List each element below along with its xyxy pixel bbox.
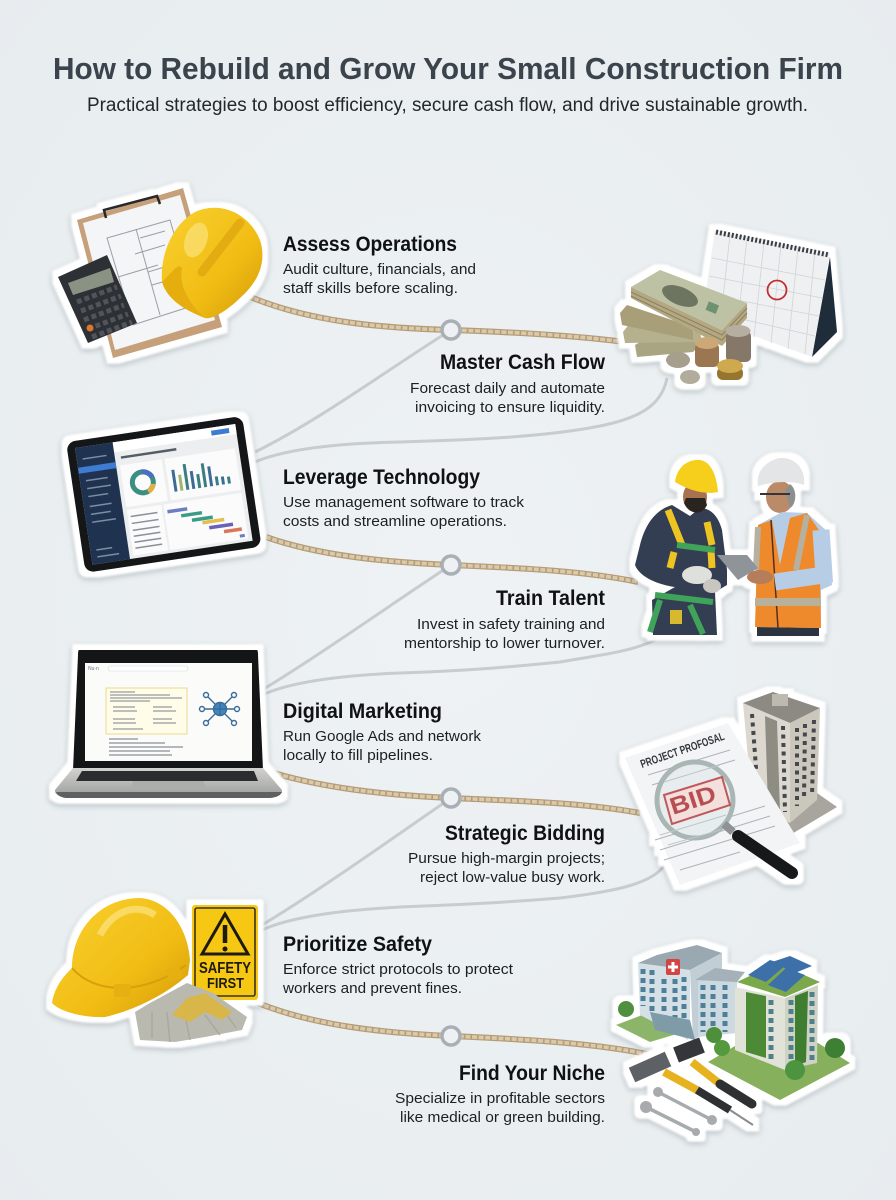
icon: laptop: Nu·n [88,666,99,672]
body: staff skills before scaling. [283,280,458,297]
body: Enforce strict protocols to protect [283,961,514,978]
rope 3 [264,770,640,813]
rope nodes [442,321,460,1045]
text: Train Talent [404,587,605,652]
heading: Digital Marketing [283,700,442,723]
rope 2 [266,537,638,582]
subtitle: Practical strategies to boost efficiency, secure cash flow, and drive sustainable growth. [87,95,808,116]
icon: safety hat, sign and gloves: FIRST [207,975,244,992]
body [283,728,482,764]
coins [666,325,751,384]
heading: Prioritize Safety [283,933,432,956]
body: Invest in safety training and [417,616,605,633]
body [404,616,605,652]
body: invoicing to ensure liquidity. [415,399,605,416]
body [408,850,605,886]
connector: grey lines, section 3 [262,798,664,930]
heading: Assess Operations [283,233,457,256]
body: mentorship to lower turnover. [404,635,605,652]
title: How to Rebuild and Grow Your Small Construction Firm [53,51,843,86]
icon: bid proposal, magnifier and building [625,692,837,885]
icon: bid proposal, magnifier and building: BID [667,781,720,821]
text: Master Cash Flow [410,351,606,416]
body [410,380,605,416]
text: Prioritize Safety [282,933,514,997]
rope 4 [258,1003,652,1055]
body [283,494,525,530]
icon: calendar, cash and coins [620,230,837,384]
icon: two construction workers [635,458,832,636]
body [282,961,514,997]
worker in orange vest [717,458,832,636]
heading: Strategic Bidding [445,822,605,845]
connector: grey lines, section 1 [255,330,667,462]
body: Audit culture, financials, and [283,261,476,278]
body: Specialize in profitable sectors [395,1090,605,1107]
gloves [135,983,247,1042]
icon: bid proposal, magnifier and building: PROJECT PROFOSAL [639,731,726,771]
body: locally to fill pipelines. [283,747,433,764]
text: Find Your Niche [395,1062,605,1126]
money stacks [620,270,747,357]
icon: clipboard, calculator and hard hat [58,188,262,358]
heading: Master Cash Flow [440,351,606,374]
body: like medical or green building. [400,1109,605,1126]
text: Digital Marketing [283,700,482,764]
body: costs and streamline operations. [283,513,507,530]
tools [632,1045,753,1136]
icon: laptop [55,650,282,798]
text: Strategic Bidding [408,822,605,886]
body: Forecast daily and automate [410,380,605,397]
heading: Find Your Niche [459,1062,605,1085]
body: workers and prevent fines. [282,980,462,997]
connector: grey lines, section 2 [262,565,655,695]
text: Assess Operations [283,233,476,297]
rope 1 [248,296,625,342]
icon: tablet dashboard [66,416,262,573]
body [395,1090,605,1126]
heading: Train Talent [496,587,605,610]
icon: hospital, green building and tools [616,945,850,1136]
text: Leverage Technology [283,466,525,530]
icon: safety hat, sign and gloves: SAFETY [199,960,252,977]
body: Pursue high-margin projects; [408,850,605,867]
worker in harness [635,460,727,635]
heading: Leverage Technology [283,466,480,489]
icon: safety hat, sign and gloves [52,898,258,1042]
body: reject low-value busy work. [420,869,605,886]
body [283,261,476,297]
body: Use management software to track [283,494,525,511]
body: Run Google Ads and network [283,728,482,745]
